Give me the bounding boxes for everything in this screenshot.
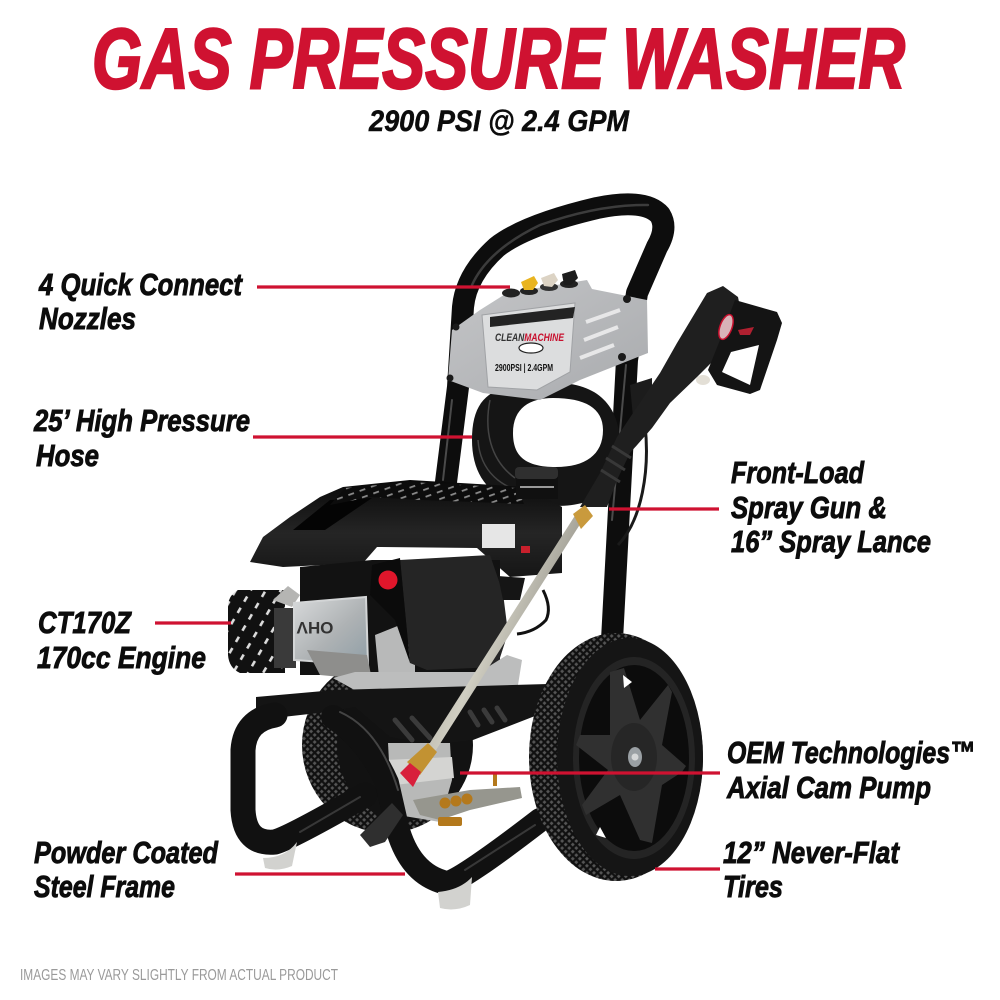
air filter housing — [370, 555, 508, 670]
heat shield foam — [274, 608, 296, 668]
callout: axial cam pump — [460, 735, 975, 805]
panel bolts — [446, 295, 631, 382]
lower engine bracket — [307, 650, 372, 680]
callout: spray gun and lance: Spray Gun & — [731, 490, 887, 525]
shroud red switch — [521, 546, 530, 553]
fuel line — [517, 590, 548, 634]
callout: never-flat tires: 12” Never-Flat — [723, 835, 900, 870]
footer disclaimer: IMAGES MAY VARY SLIGHTLY FROM ACTUAL PRODUCT — [20, 967, 338, 984]
subtitle: 2900 PSI @ 2.4 GPM — [368, 105, 630, 138]
panel label strip — [490, 307, 575, 327]
callout: spray gun and lance: Front-Load — [731, 455, 865, 490]
muffler guard — [228, 590, 285, 673]
nozzles — [502, 270, 578, 298]
callout: never-flat tires: Tires — [723, 869, 783, 904]
pressure washer product image — [228, 204, 782, 909]
panel brand: CLEANMACHINE — [495, 332, 565, 344]
callout: engine — [37, 605, 231, 675]
engine body — [300, 560, 500, 675]
panel SIMPSON logo — [519, 343, 543, 353]
OHV engine cover — [294, 597, 368, 665]
callout: engine: CT170Z — [38, 605, 132, 640]
callout: quick connect nozzles: Nozzles — [39, 301, 136, 336]
callout: powder coated frame: Steel Frame — [34, 869, 175, 904]
panel ribs — [580, 310, 620, 358]
callout: high pressure hose — [33, 403, 472, 473]
callout: powder coated frame: Powder Coated — [34, 835, 219, 870]
engine base plate — [333, 655, 522, 693]
rubber feet — [263, 842, 472, 909]
carburetor — [375, 625, 415, 688]
lance — [400, 505, 593, 787]
shroud data sticker — [482, 524, 515, 548]
pump — [385, 743, 522, 826]
hub — [628, 747, 642, 767]
callout: quick connect nozzles — [38, 267, 510, 336]
lower frame tubes — [243, 712, 540, 883]
brass couplers — [573, 505, 593, 529]
wheel gaps — [596, 675, 632, 838]
frame deck — [256, 684, 548, 745]
deck indentations — [395, 708, 505, 740]
engine fittings — [498, 576, 525, 600]
front wheel — [529, 633, 703, 881]
callout: quick connect nozzles: 4 Quick Connect — [38, 267, 243, 302]
callout: engine: 170cc Engine — [37, 640, 206, 675]
panel front face — [482, 303, 575, 390]
hose coil — [472, 378, 652, 545]
callout: powder coated frame — [34, 835, 405, 904]
spray gun grip — [708, 300, 782, 394]
callout: spray gun and lance: 16” Spray Lance — [731, 524, 931, 559]
brass outlets — [438, 772, 497, 826]
primer bulb — [378, 570, 398, 590]
callout: high pressure hose: 25’ High Pressure — [33, 403, 250, 438]
panel rating: 2900PSI | 2.4GPM — [495, 363, 553, 374]
wheel spokes — [576, 668, 686, 843]
OHV engine cover: OHV — [296, 618, 333, 637]
fuel cap — [515, 467, 558, 499]
U-shaped frame tube: handle and uprights — [443, 204, 663, 640]
spark plug — [273, 586, 300, 607]
red nozzle tip — [400, 763, 421, 787]
callout: spray gun and lance — [609, 455, 931, 559]
spray gun and wand — [580, 286, 782, 507]
callout: high pressure hose: Hose — [36, 438, 99, 473]
engine shroud — [250, 467, 562, 577]
frame bracket — [360, 803, 403, 847]
rear wheel — [302, 657, 473, 833]
callout: never-flat tires — [655, 835, 900, 904]
callout: axial cam pump: Axial Cam Pump — [726, 770, 931, 805]
control panel — [446, 270, 648, 400]
